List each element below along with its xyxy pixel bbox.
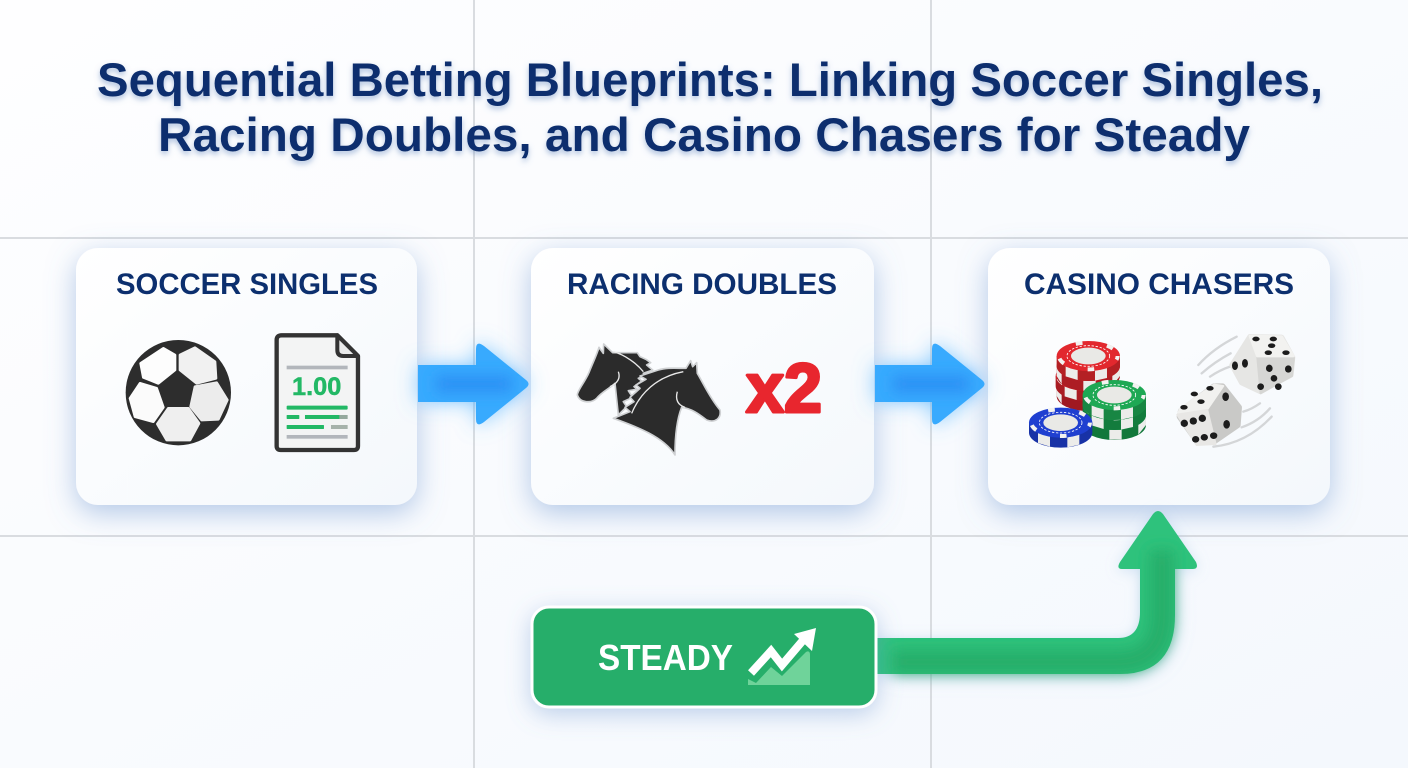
heading: racing doubles: RACING DOUBLES	[567, 268, 837, 301]
panel: racing doubles	[531, 248, 874, 505]
panel: steady	[532, 607, 876, 707]
icon: dice	[1177, 336, 1294, 447]
title: Racing Doubles, and Casino Chasers for Steady	[158, 108, 1250, 161]
arrow: steady to casino chasers	[875, 511, 1197, 674]
heading: soccer singles: SOCCER SINGLES	[116, 268, 378, 301]
icon: rising chart	[748, 628, 816, 685]
text: steady: STEADY	[598, 637, 733, 678]
heading: casino chasers: CASINO CHASERS	[1024, 268, 1294, 301]
arrow: soccer singles to racing doubles	[418, 344, 528, 424]
icon: betting slip	[277, 335, 358, 450]
arrow: racing doubles to casino chasers	[875, 344, 984, 424]
text: x2 multiplier: x2	[746, 349, 822, 427]
icon: betting slip: 1.00	[292, 373, 341, 401]
panel: casino chasers	[988, 248, 1330, 505]
panel: soccer singles	[76, 248, 417, 505]
icon: poker chips	[1029, 341, 1146, 448]
title: Sequential Betting Blueprints: Linking Soccer Singles,	[97, 53, 1323, 106]
title	[97, 53, 1323, 161]
icon: soccer ball	[126, 340, 231, 445]
icon: two horses	[577, 344, 720, 455]
